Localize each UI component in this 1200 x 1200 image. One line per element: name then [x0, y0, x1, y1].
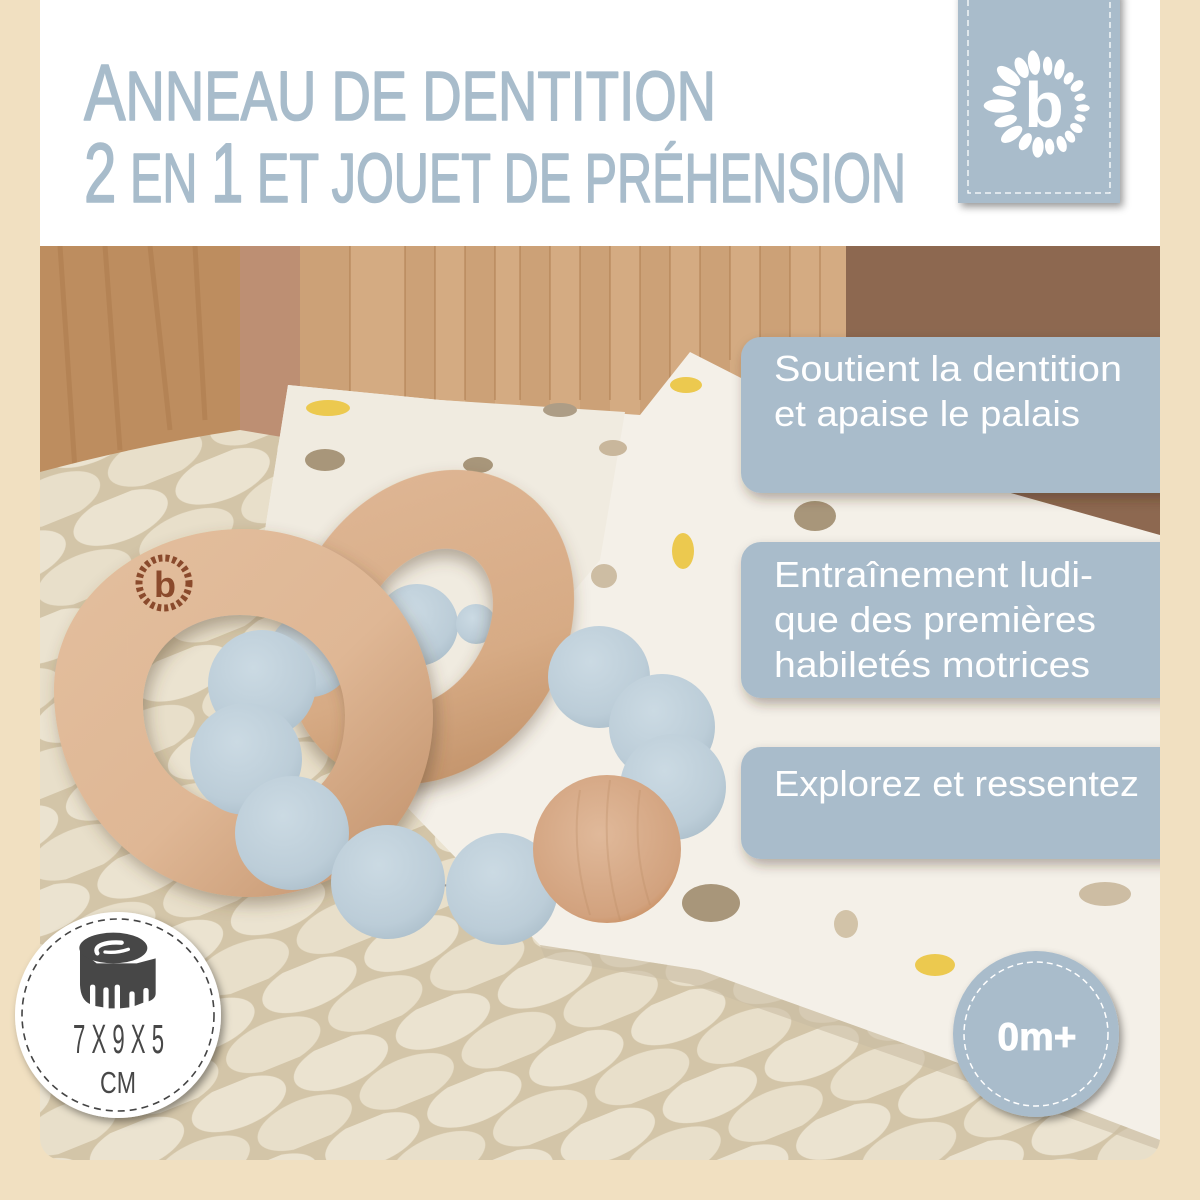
dots on cloth	[305, 377, 1131, 976]
age badge: 0m+	[997, 1016, 1077, 1059]
benefit panel 3	[741, 747, 1180, 859]
title: ANNEAU DE DENTITION	[84, 48, 716, 137]
dimensions: 7 X 9 X 5	[73, 1016, 164, 1062]
beads behind rear ring	[388, 584, 492, 665]
benefit panel 1	[741, 337, 1180, 493]
benefit panel 3: Explorez et ressentez	[774, 763, 1139, 804]
benefit panel 2	[741, 542, 1180, 698]
size badge: CM	[100, 1065, 136, 1100]
benefit panel 1: et apaise le palais	[774, 393, 1080, 434]
benefit panel 2: habiletés motrices	[774, 644, 1090, 685]
crochet blanket	[40, 430, 1160, 1160]
icon: rolled measure	[79, 933, 156, 1008]
benefit panel 2: que des premières	[774, 599, 1096, 640]
size badge	[15, 912, 221, 1118]
title: 2 EN 1 ET JOUET DE PRÉHENSION	[84, 126, 906, 220]
wooden backdrop	[40, 246, 1160, 546]
logo tag	[958, 0, 1120, 203]
benefit panels	[741, 337, 1180, 859]
muslin cloth	[265, 352, 1160, 1150]
icon: burned logo: b	[154, 564, 176, 605]
rear wooden ring	[293, 469, 584, 802]
benefit panel 2: Entraînement ludi-	[774, 554, 1093, 595]
product photo	[40, 246, 1160, 1160]
benefit panel 1: Soutient la dentition	[774, 348, 1122, 389]
silicone beads and wooden bead	[190, 626, 726, 945]
icon: burned logo	[139, 558, 189, 608]
bead behind front ring	[275, 624, 340, 697]
icon: sunflower logo	[983, 50, 1090, 158]
age badge	[953, 951, 1119, 1117]
title	[84, 48, 906, 220]
title panel	[40, 0, 1160, 246]
icon: sunflower logo: b	[1024, 69, 1064, 141]
front wooden ring with logo	[54, 529, 433, 897]
